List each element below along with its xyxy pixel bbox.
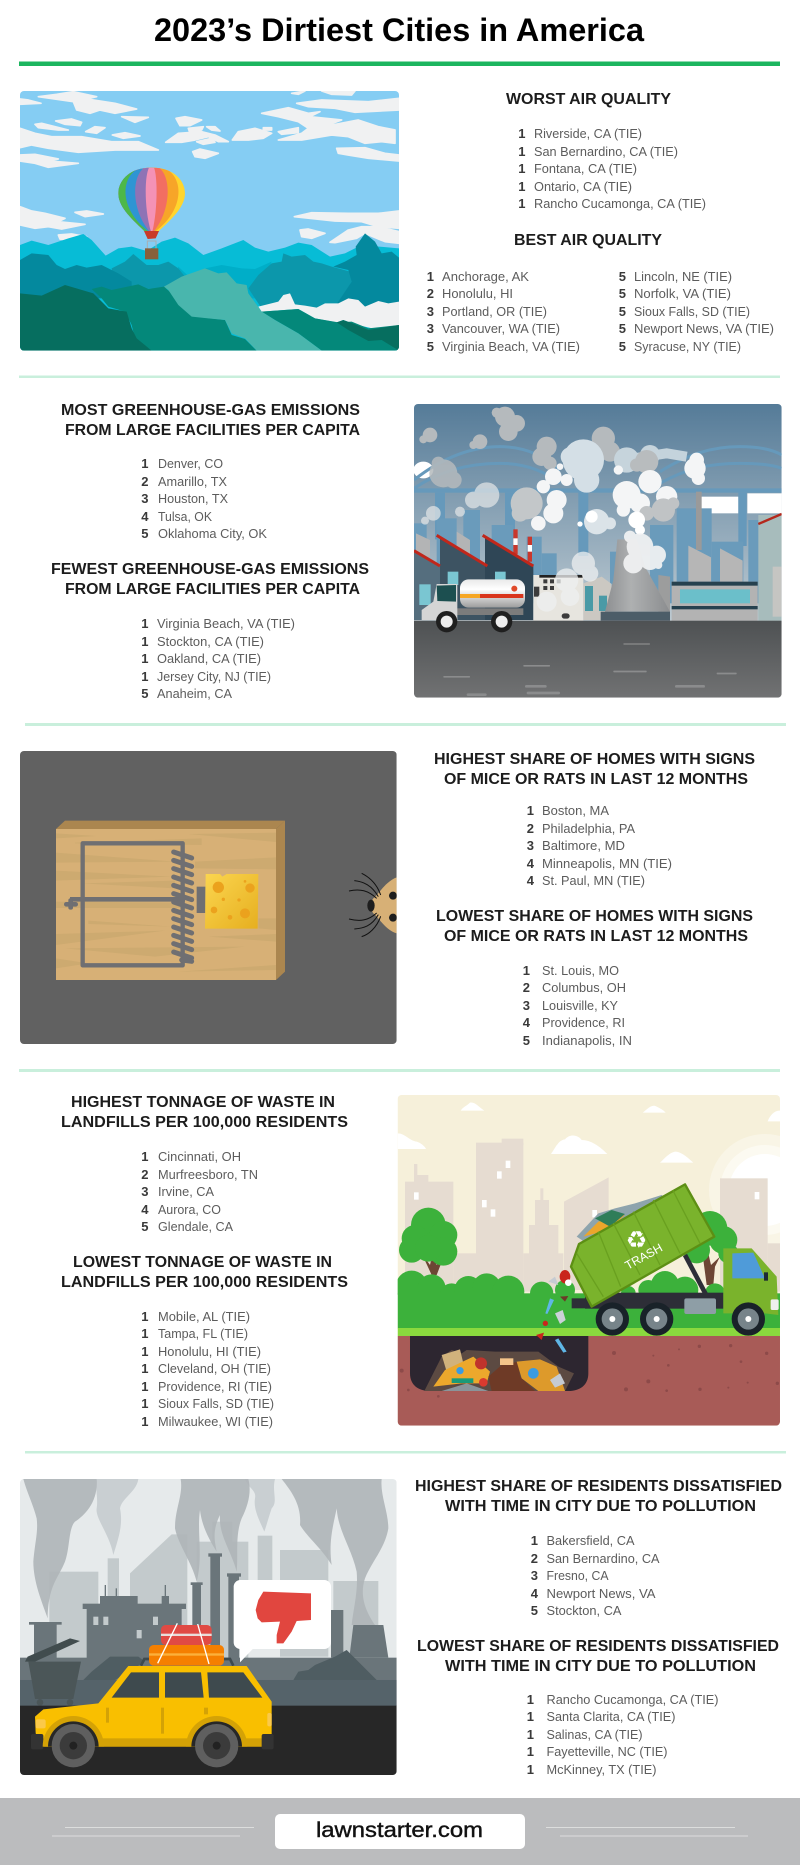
section: landfill waste	[61, 1094, 800, 1429]
icon: mouse head	[349, 873, 397, 937]
heading: highest share dissatisfied	[415, 1478, 782, 1515]
list: best air quality, left column: 2	[427, 286, 434, 301]
list: highest tonnage: 3	[141, 1184, 148, 1199]
heading: highest tonnage of waste	[61, 1094, 348, 1131]
list: highest tonnage: Glendale, CA	[158, 1219, 233, 1234]
list: highest tonnage: 5	[141, 1219, 148, 1234]
smoke plumes	[23, 1479, 388, 1625]
list: best air quality, right column: 5	[619, 321, 626, 336]
list: highest share mice or rats: 4	[527, 873, 535, 888]
heading: worst air quality: WORST AIR QUALITY	[506, 91, 671, 108]
icon: trash can	[25, 1638, 81, 1706]
list: best air quality, right column: Sioux Falls, SD (TIE)	[634, 304, 750, 319]
list: fewest emissions: 1	[141, 616, 148, 631]
website: lawnstarter.com	[316, 1819, 483, 1842]
background buildings	[49, 1522, 378, 1658]
footer	[0, 1798, 800, 1865]
list: highest share dissatisfied: 4	[531, 1586, 539, 1601]
list: lowest tonnage: 1	[141, 1344, 148, 1359]
list: lowest tonnage: Honolulu, HI (TIE)	[158, 1344, 261, 1359]
recycle symbol: ♻	[626, 1226, 647, 1254]
list: lowest share dissatisfied: 1	[527, 1727, 534, 1742]
illustration: mousetrap and mouse	[20, 751, 397, 1044]
list: best air quality, left column: Portland, OR (TIE)	[442, 304, 547, 319]
list: highest share mice or rats: Boston, MA	[542, 803, 609, 818]
list: lowest tonnage: Sioux Falls, SD (TIE)	[158, 1396, 274, 1411]
heading: lowest share of homes with mice or rats: LOWEST SHARE OF HOMES WITH SIGNS	[436, 908, 753, 925]
list: highest tonnage: Cincinnati, OH	[158, 1149, 241, 1164]
list: lowest tonnage: 1	[141, 1361, 148, 1376]
list: lowest tonnage: Mobile, AL (TIE)	[158, 1309, 250, 1324]
list: worst air quality: 1	[518, 144, 526, 159]
heading: highest tonnage of waste: LANDFILLS PER 100,000 RESIDENTS	[61, 1114, 348, 1131]
list: fewest emissions: 5	[141, 686, 148, 701]
list: lowest share mice or rats: Louisville, KY	[542, 998, 618, 1013]
ground and pit	[398, 1336, 780, 1426]
list: best air quality, left column	[427, 269, 580, 354]
icon: trap wire and spring	[64, 843, 205, 965]
list: lowest tonnage: Providence, RI (TIE)	[158, 1379, 272, 1394]
list: lowest share dissatisfied: 1	[527, 1762, 534, 1777]
list: highest share mice or rats: Philadelphia, PA	[542, 821, 635, 836]
list: highest tonnage: 1	[141, 1149, 148, 1164]
list: best air quality, right column: 5	[619, 339, 626, 354]
list: worst air quality: Rancho Cucamonga, CA (TIE)	[534, 196, 706, 211]
list: highest tonnage	[141, 1149, 258, 1234]
list: lowest share dissatisfied: Rancho Cucamonga, CA (TIE)	[546, 1692, 718, 1707]
list: best air quality, left column: Virginia Beach, VA (TIE)	[442, 339, 580, 354]
heading: lowest tonnage of waste: LANDFILLS PER 100,000 RESIDENTS	[61, 1274, 348, 1291]
list: worst air quality: San Bernardino, CA (TIE)	[534, 144, 678, 159]
list: worst air quality: Ontario, CA (TIE)	[534, 179, 632, 194]
list: highest share dissatisfied: 3	[531, 1568, 538, 1583]
list: lowest share dissatisfied	[527, 1692, 718, 1777]
list: worst air quality: 1	[518, 161, 526, 176]
list: lowest share mice or rats: Columbus, OH	[542, 980, 626, 995]
list: lowest share mice or rats: St. Louis, MO	[542, 963, 619, 978]
list: lowest share mice or rats: 2	[523, 980, 530, 995]
smoke	[419, 407, 706, 535]
list: best air quality, left column: 3	[427, 321, 434, 336]
list: lowest tonnage: Tampa, FL (TIE)	[158, 1326, 248, 1341]
factory buildings	[414, 492, 782, 621]
icon: tanker truck	[422, 579, 525, 632]
list: best air quality, left column: Anchorage, AK	[442, 269, 529, 284]
list: best air quality, left column: Vancouver, WA (TIE)	[442, 321, 560, 336]
icon: speech bubble with thumbs-down	[234, 1580, 331, 1662]
list: highest tonnage: Murfreesboro, TN	[158, 1167, 258, 1182]
section: mice or rats	[20, 751, 755, 1048]
list: highest share dissatisfied	[531, 1533, 660, 1618]
list: lowest share mice or rats	[523, 963, 632, 1048]
illustration: factories, smoke and tanker truck	[413, 404, 782, 698]
list: highest share dissatisfied: 5	[531, 1603, 538, 1618]
list: highest share mice or rats: 4	[527, 856, 535, 871]
list: worst air quality: Fontana, CA (TIE)	[534, 161, 637, 176]
list: lowest share dissatisfied: McKinney, TX (TIE)	[546, 1762, 656, 1777]
bridge	[414, 447, 782, 556]
list: best air quality, left column: 5	[427, 339, 434, 354]
list: lowest tonnage: 1	[141, 1309, 148, 1324]
list: highest share mice or rats: Baltimore, MD	[542, 838, 625, 853]
title underline	[19, 62, 780, 66]
icon: balloon	[118, 168, 185, 260]
list: lowest share dissatisfied: 1	[527, 1744, 534, 1759]
list: highest share dissatisfied: Fresno, CA	[546, 1568, 609, 1583]
trash in dumper	[576, 1195, 662, 1240]
icon: mousetrap board	[56, 821, 285, 980]
list: highest share mice or rats	[527, 803, 672, 888]
list: lowest tonnage: 1	[141, 1396, 148, 1411]
list: worst air quality: 1	[518, 196, 526, 211]
list: most emissions: Houston, TX	[158, 491, 228, 506]
list: fewest emissions: 1	[141, 669, 148, 684]
list: highest share mice or rats: Minneapolis, MN (TIE)	[542, 856, 672, 871]
list: lowest share mice or rats: 4	[523, 1015, 531, 1030]
heading: lowest share of homes with mice or rats	[436, 908, 753, 945]
list: worst air quality: 1	[518, 126, 526, 141]
illustration: garbage truck dumping into landfill	[396, 1095, 800, 1426]
list: fewest emissions	[141, 616, 295, 701]
list: most emissions	[141, 456, 267, 541]
list: best air quality, left column: 1	[427, 269, 434, 284]
list: fewest emissions: Jersey City, NJ (TIE)	[157, 669, 271, 684]
list: highest tonnage: Aurora, CO	[158, 1202, 221, 1217]
list: lowest tonnage: 1	[141, 1379, 148, 1394]
foreground factory silhouettes	[20, 1553, 397, 1706]
heading: highest share of homes with mice or rats	[434, 751, 755, 788]
heading: lowest share dissatisfied: LOWEST SHARE OF RESIDENTS DISSATISFIED	[417, 1638, 779, 1655]
icon: cheese	[205, 874, 258, 929]
list: best air quality, right column: Newport News, VA (TIE)	[634, 321, 774, 336]
heading: lowest tonnage of waste	[61, 1254, 348, 1291]
list: fewest emissions: Stockton, CA (TIE)	[157, 634, 264, 649]
list: best air quality, right column: Lincoln, NE (TIE)	[634, 269, 732, 284]
list: lowest share mice or rats: Indianapolis, IN	[542, 1033, 632, 1048]
heading: most greenhouse-gas emissions: FROM LARGE FACILITIES PER CAPITA	[65, 422, 360, 439]
heading: lowest share dissatisfied: WITH TIME IN CITY DUE TO POLLUTION	[445, 1658, 756, 1675]
list: most emissions: Tulsa, OK	[158, 509, 212, 524]
list: fewest emissions: Oakland, CA (TIE)	[157, 651, 261, 666]
heading: most greenhouse-gas emissions: MOST GREENHOUSE-GAS EMISSIONS	[61, 402, 360, 419]
list: highest tonnage: 2	[141, 1167, 148, 1182]
list: fewest emissions: Virginia Beach, VA (TIE)	[157, 616, 295, 631]
list: highest share mice or rats: 2	[527, 821, 534, 836]
list: most emissions: 4	[141, 509, 149, 524]
list: lowest share dissatisfied: Fayetteville, NC (TIE)	[546, 1744, 668, 1759]
list: highest tonnage: Irvine, CA	[158, 1184, 214, 1199]
list: lowest share mice or rats: 5	[523, 1033, 530, 1048]
list: highest share dissatisfied: Stockton, CA	[546, 1603, 622, 1618]
trees	[399, 1208, 738, 1285]
label: TRASH: TRASH	[623, 1241, 665, 1272]
section: dissatisfied with pollution	[20, 1478, 782, 1777]
illustration: hot-air balloon over mountains	[20, 91, 399, 351]
list: most emissions: 5	[141, 526, 148, 541]
list: highest share dissatisfied: Bakersfield, CA	[546, 1533, 635, 1548]
heading: lowest share dissatisfied	[417, 1638, 779, 1675]
heading: lowest tonnage of waste: LOWEST TONNAGE OF WASTE IN	[73, 1254, 332, 1271]
heading: fewest greenhouse-gas emissions: FEWEST GREENHOUSE-GAS EMISSIONS	[51, 561, 369, 578]
list: highest share dissatisfied: Newport News, VA	[546, 1586, 656, 1601]
list: best air quality, right column: Syracuse, NY (TIE)	[634, 339, 741, 354]
list: best air quality, left column: 3	[427, 304, 434, 319]
heading: fewest greenhouse-gas emissions: FROM LARGE FACILITIES PER CAPITA	[65, 581, 360, 598]
list: lowest share dissatisfied: Santa Clarita, CA (TIE)	[546, 1709, 676, 1724]
heading: most greenhouse-gas emissions	[61, 402, 360, 439]
list: fewest emissions: 1	[141, 651, 148, 666]
list: lowest tonnage: Milwaukee, WI (TIE)	[158, 1414, 273, 1429]
list: lowest share mice or rats: Providence, RI	[542, 1015, 625, 1030]
list: most emissions: 3	[141, 491, 148, 506]
list: fewest emissions: 1	[141, 634, 148, 649]
list: best air quality, right column: Norfolk, VA (TIE)	[634, 286, 731, 301]
list: most emissions: 1	[141, 456, 148, 471]
skyline	[405, 1139, 780, 1292]
heading: highest share dissatisfied: WITH TIME IN CITY DUE TO POLLUTION	[445, 1498, 756, 1515]
list: lowest share mice or rats: 1	[523, 963, 530, 978]
list: highest share mice or rats: St. Paul, MN (TIE)	[542, 873, 645, 888]
list: most emissions: Denver, CO	[158, 456, 223, 471]
icon: garbage truck	[571, 1184, 779, 1336]
clouds	[398, 1103, 780, 1163]
list: worst air quality	[518, 126, 706, 211]
list: lowest tonnage: 1	[141, 1414, 148, 1429]
list: highest tonnage: 4	[141, 1202, 149, 1217]
section: air quality	[20, 91, 774, 354]
heading: best air quality: BEST AIR QUALITY	[514, 232, 662, 249]
illustration: car, smog and thumbs-down	[20, 1479, 397, 1775]
list: lowest share dissatisfied: 1	[527, 1692, 534, 1707]
list: highest share dissatisfied: 1	[531, 1533, 538, 1548]
list: highest share dissatisfied: San Bernardino, CA	[546, 1551, 660, 1566]
list: lowest share mice or rats: 3	[523, 998, 530, 1013]
list: highest share mice or rats: 3	[527, 838, 534, 853]
list: lowest tonnage: Cleveland, OH (TIE)	[158, 1361, 271, 1376]
list: most emissions: Amarillo, TX	[158, 474, 227, 489]
heading: fewest greenhouse-gas emissions	[51, 561, 369, 598]
list: lowest tonnage: 1	[141, 1326, 148, 1341]
list: best air quality, left column: Honolulu, HI	[442, 286, 513, 301]
list: most emissions: Oklahoma City, OK	[158, 526, 267, 541]
list: most emissions: 2	[141, 474, 148, 489]
section: greenhouse-gas emissions	[51, 402, 782, 701]
list: worst air quality: 1	[518, 179, 526, 194]
falling trash	[536, 1270, 572, 1353]
heading: lowest share of homes with mice or rats: OF MICE OR RATS IN LAST 12 MONTHS	[444, 928, 748, 945]
heading: highest share of homes with mice or rats: HIGHEST SHARE OF HOMES WITH SIGNS	[434, 751, 755, 768]
list: best air quality, right column	[619, 269, 774, 354]
list: fewest emissions: Anaheim, CA	[157, 686, 232, 701]
icon: yellow car with luggage	[31, 1623, 274, 1767]
title: 2023’s Dirtiest Cities in America	[154, 12, 644, 48]
list: lowest tonnage	[141, 1309, 274, 1429]
list: best air quality, right column: 5	[619, 286, 626, 301]
list: best air quality, right column: 5	[619, 304, 626, 319]
list: worst air quality: Riverside, CA (TIE)	[534, 126, 642, 141]
heading: highest share dissatisfied: HIGHEST SHARE OF RESIDENTS DISSATISFIED	[415, 1478, 782, 1495]
bushes	[396, 1271, 780, 1328]
heading: highest tonnage of waste: HIGHEST TONNAGE OF WASTE IN	[71, 1094, 335, 1111]
heading: highest share of homes with mice or rats: OF MICE OR RATS IN LAST 12 MONTHS	[444, 771, 748, 788]
list: best air quality, right column: 5	[619, 269, 626, 284]
list: highest share mice or rats: 1	[527, 803, 534, 818]
list: lowest share dissatisfied: Salinas, CA (TIE)	[546, 1727, 642, 1742]
list: lowest share dissatisfied: 1	[527, 1709, 534, 1724]
list: highest share dissatisfied: 2	[531, 1551, 538, 1566]
